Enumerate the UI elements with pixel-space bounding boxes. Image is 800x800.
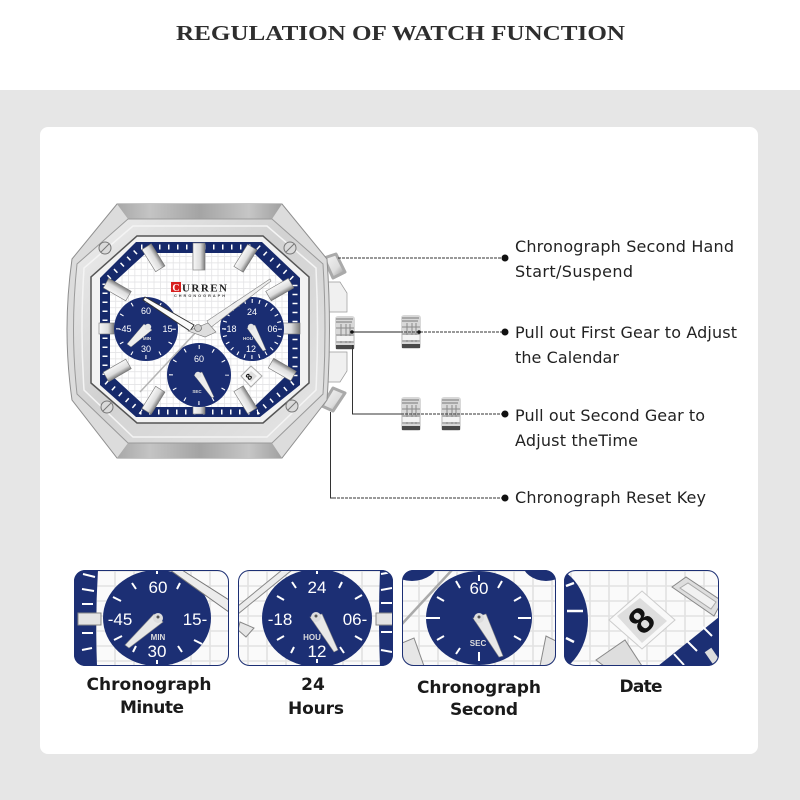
- white grid dial: [110, 253, 288, 407]
- subdial: 24 hours: -18: [223, 324, 237, 334]
- subdial: 24 hours: HOU: [243, 336, 253, 341]
- label: chronograph second hand: Chronograph Second Hand: [515, 237, 734, 256]
- thumbnail: chronograph second: 60: [470, 579, 488, 598]
- dial frame: [91, 236, 309, 423]
- label: second gear: Pull out Second Gear to: [515, 406, 705, 425]
- thumbnail: chronograph minute: -45: [108, 610, 132, 629]
- thumbnail: 24 hours: -18: [268, 610, 292, 629]
- date window: 8: [244, 372, 254, 382]
- subdial: seconds: [167, 343, 231, 407]
- bezel screws: [99, 242, 298, 413]
- brand logo: C: [172, 283, 180, 294]
- caption: chronograph minute: [86, 675, 212, 718]
- label: reset key: Chronograph Reset Key: [515, 488, 706, 507]
- panel: main card: [40, 127, 758, 754]
- caption: chronograph minute: Chronograph: [86, 675, 212, 695]
- subdial: minutes: [114, 297, 178, 361]
- thumbnail: chronograph second: [402, 570, 556, 666]
- thumbnail: chronograph second: SEC: [470, 639, 486, 648]
- thumbnail: chronograph minute: MIN: [151, 633, 166, 642]
- pushers and crown: [322, 254, 355, 411]
- date window: [241, 366, 262, 387]
- watch hands: [140, 279, 271, 392]
- subdial: minutes: 60: [141, 306, 151, 316]
- thumbnail: chronograph minute: 30: [148, 642, 166, 661]
- subdial: 24 hours: 24: [247, 307, 257, 317]
- subdial: minutes: MIN: [143, 336, 151, 341]
- label: chronograph second hand: [515, 237, 734, 281]
- thumbnail: date: 8: [620, 599, 663, 642]
- thumbnail: 24 hours: [238, 569, 393, 667]
- label: first gear: Pull out First Gear to Adjust: [515, 323, 737, 342]
- thumbnail: 24 hours: HOU: [303, 633, 321, 642]
- caption: chronograph minute: Minute: [120, 698, 184, 718]
- thumbnail: 24 hours: 12: [308, 642, 326, 661]
- subdial: seconds: 60: [194, 354, 204, 364]
- subdial: 24 hours: 06-: [267, 324, 281, 334]
- brand logo: CHRONOGRAPH: [174, 294, 225, 298]
- caption: chronograph second: Second: [450, 700, 518, 720]
- caption: chronograph second: Chronograph: [417, 678, 541, 698]
- bezel: [74, 219, 325, 443]
- label: second gear: Adjust theTime: [515, 431, 638, 450]
- leader line: first gear: [350, 328, 508, 336]
- hour indices: [99, 243, 300, 414]
- thumbnail: chronograph minute: 60: [149, 578, 167, 597]
- thumbnail: 24 hours: 06-: [343, 610, 367, 629]
- label: second gear: [515, 406, 705, 450]
- subdial: seconds: SEC: [192, 389, 202, 394]
- label: first gear: the Calendar: [515, 348, 619, 367]
- case: [67, 204, 330, 458]
- thumbnail: date: [564, 570, 719, 666]
- leader line: second gear: [352, 345, 508, 418]
- caption: 24 hours: Hours: [288, 699, 344, 719]
- subdial: minutes: 15-: [162, 324, 176, 334]
- brand logo: [171, 282, 227, 298]
- brand logo: URREN: [182, 282, 227, 294]
- subdial: 24 hours: 12: [246, 344, 256, 354]
- thumbnail: 24 hours: 24: [308, 578, 326, 597]
- leader line: chronograph start: [338, 254, 508, 262]
- subdial: 24 hours: [220, 297, 284, 361]
- caption: 24 hours: 24: [301, 675, 325, 695]
- label: chronograph second hand: Start/Suspend: [515, 262, 633, 281]
- icon: crown second gear b: [441, 397, 461, 431]
- subdial: minutes: -45: [118, 324, 132, 334]
- thumbnail: chronograph minute: 15-: [183, 610, 207, 629]
- subdial: minutes: 30: [141, 344, 151, 354]
- blue minute ring: [100, 242, 300, 417]
- leader line: reset key: [330, 412, 508, 502]
- caption: chronograph second: [417, 678, 541, 720]
- icon: crown first gear: [401, 315, 421, 349]
- thumbnail: chronograph minute: [74, 570, 229, 666]
- label: first gear: [515, 323, 737, 367]
- caption: 24 hours: [288, 675, 344, 719]
- icon: watch: [67, 204, 355, 458]
- title: REGULATION OF WATCH FUNCTION: [176, 21, 625, 45]
- icon: crown second gear a: [401, 397, 421, 431]
- caption: date: Date: [620, 677, 662, 697]
